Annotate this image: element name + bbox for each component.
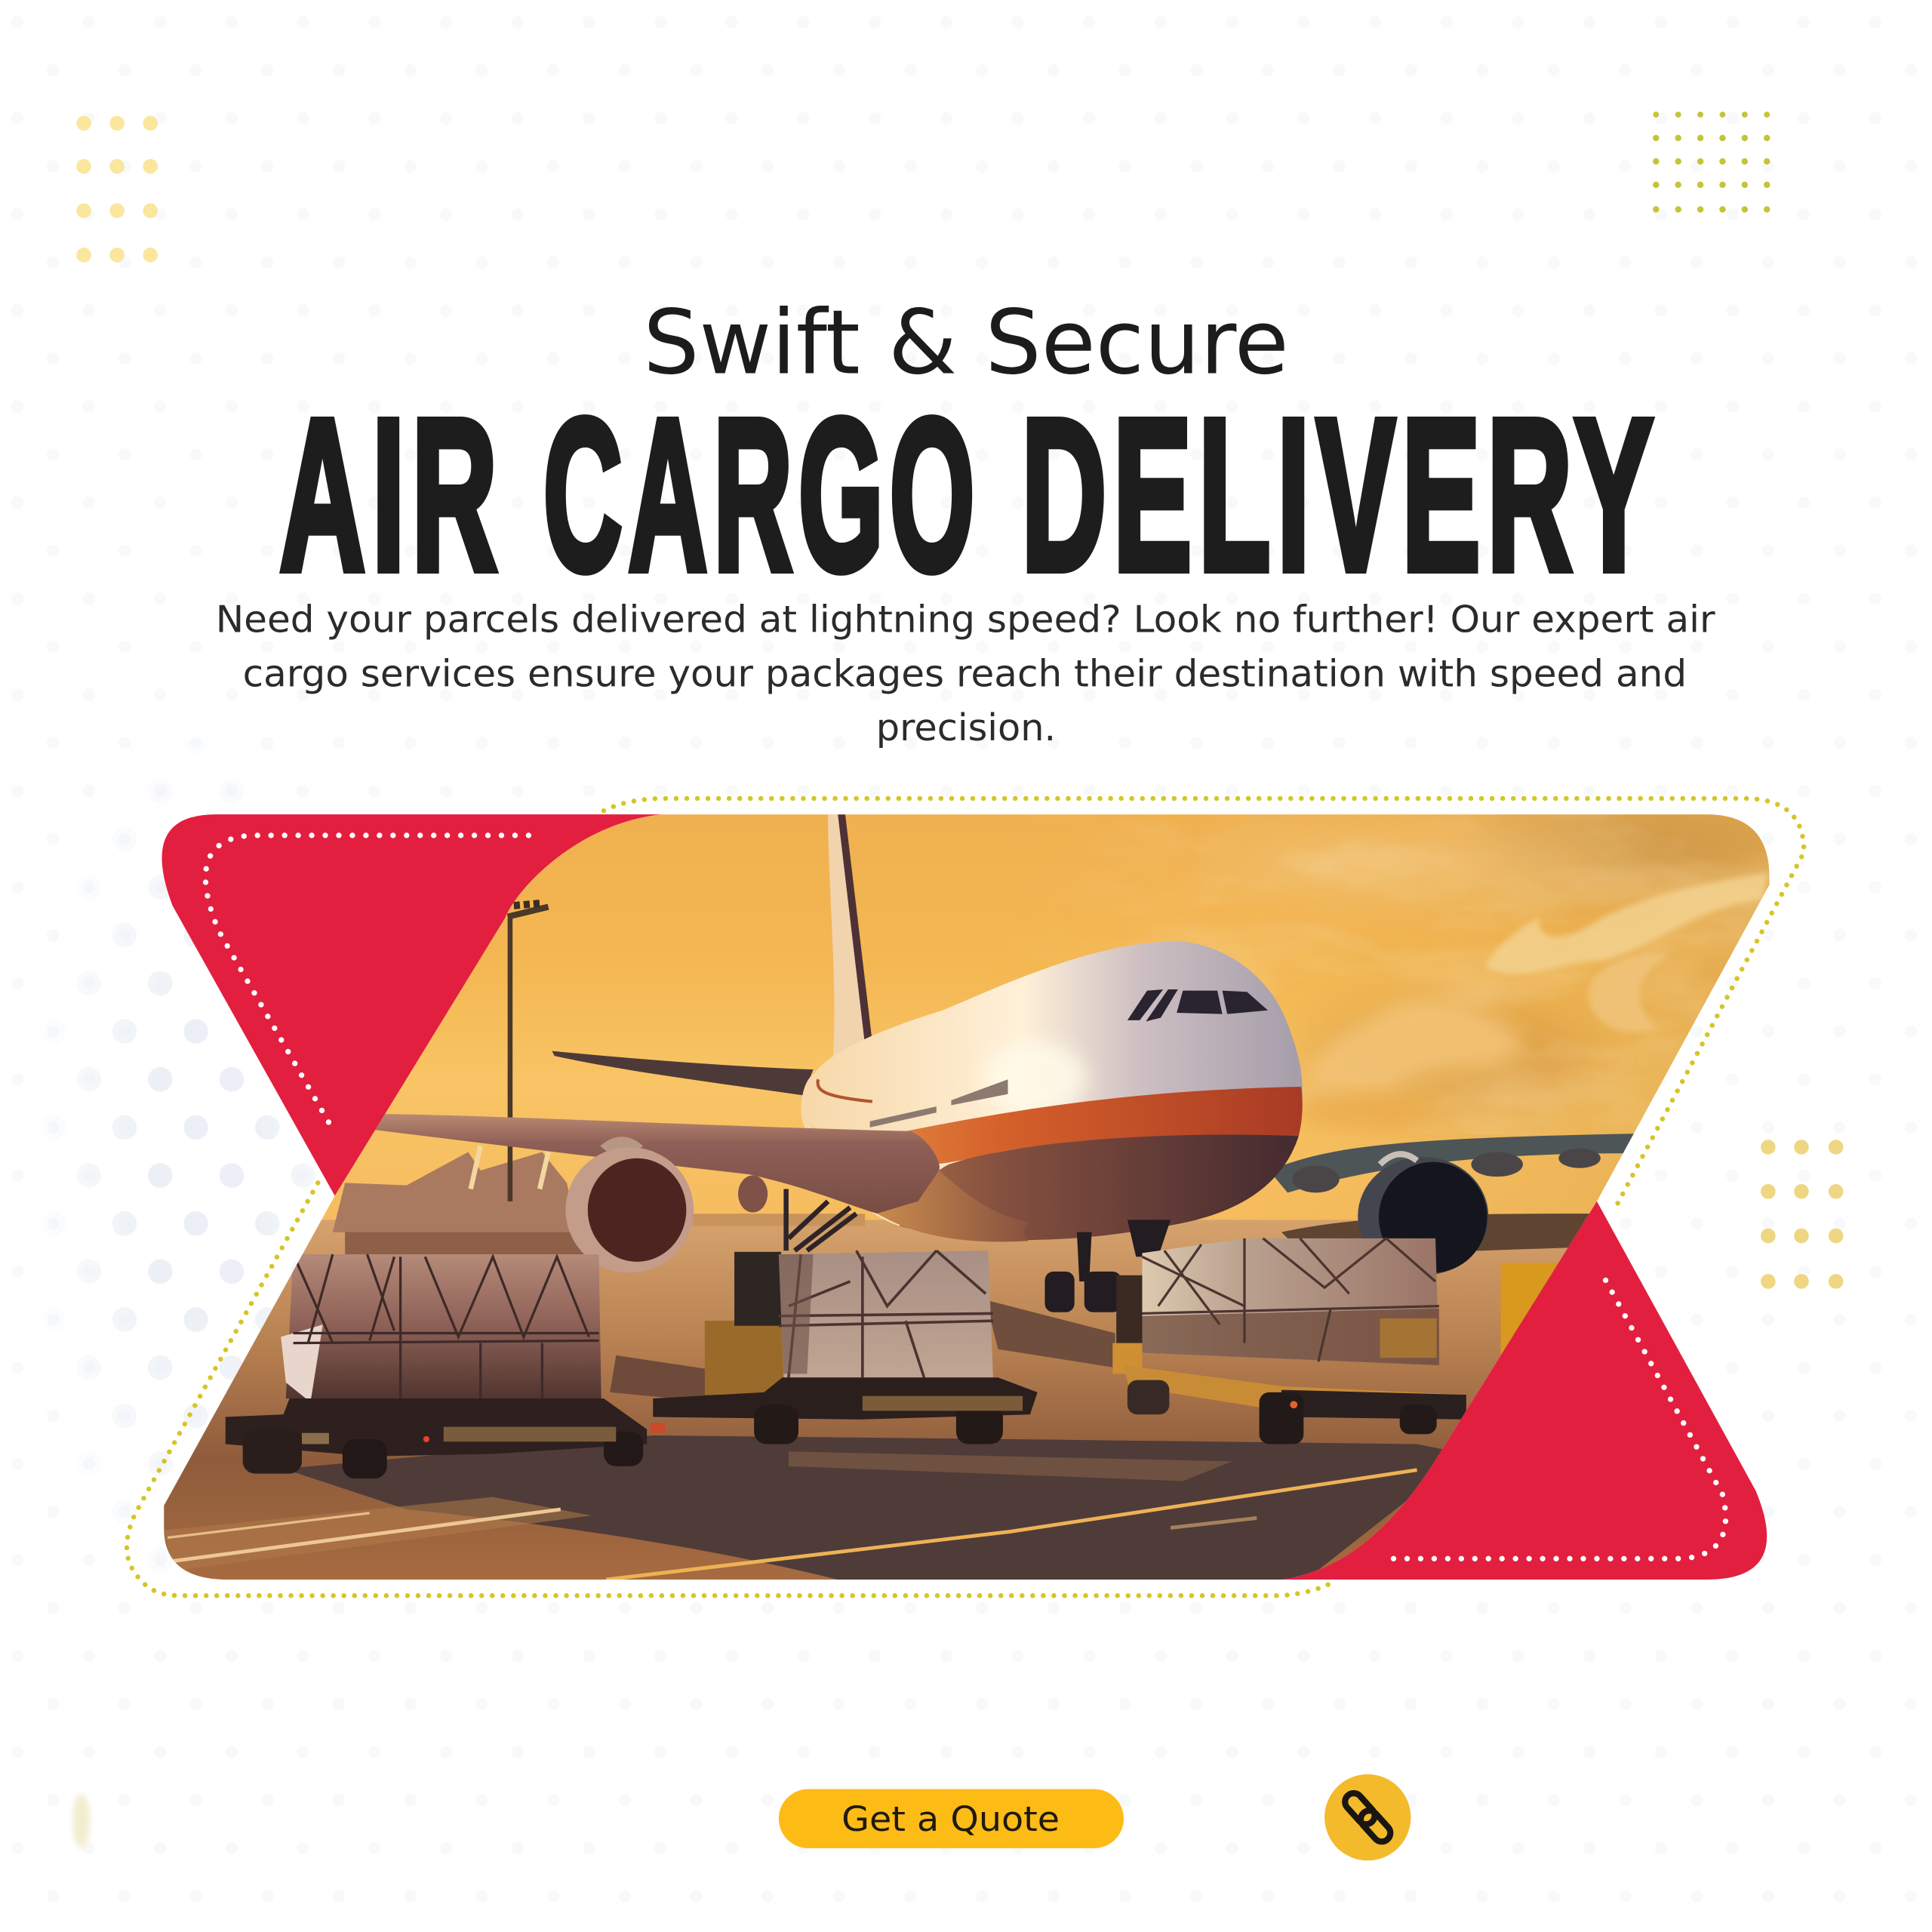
nose and main landing gear	[1044, 1220, 1171, 1312]
left landing gear struts	[786, 1189, 857, 1251]
decorative olive dots top right	[1653, 112, 1770, 213]
description text: cargo services ensure your packages reach their destination with speed and	[243, 652, 1687, 695]
decorative gold dots right	[1761, 1140, 1843, 1289]
middle tractor and box	[705, 1252, 783, 1395]
right dolly	[1112, 1275, 1466, 1444]
button: get a quote: Get a Quote	[841, 1799, 1060, 1839]
clouds	[1094, 814, 1769, 1135]
middle cargo pallet	[779, 1251, 993, 1377]
subtitle: Swift & Secure	[643, 291, 1289, 395]
photo: cargo plane at sunset	[160, 807, 1774, 1589]
cockpit windows	[1128, 989, 1268, 1021]
red shape top left	[162, 814, 662, 1196]
left wing	[374, 1114, 940, 1214]
yellow container	[1501, 1263, 1562, 1374]
main heading: CARGO	[543, 374, 981, 615]
white dotted accent top left	[205, 835, 528, 1125]
decorative gold dots top left	[76, 115, 158, 263]
far right wing	[1269, 1134, 1638, 1192]
page background with faint dot pattern	[47, 740, 315, 1566]
main heading: AIR	[280, 374, 504, 615]
description text: Need your parcels delivered at lightning speed? Look no further! Our expert air	[216, 598, 1716, 641]
icon: link badge	[1324, 1774, 1411, 1860]
under-wing pod	[738, 1176, 768, 1213]
red shape bottom right	[1281, 1201, 1767, 1580]
button: get a quote	[779, 1789, 1124, 1848]
tarmac shadows and lines	[164, 1300, 1466, 1580]
white dotted accent bottom right	[1394, 1278, 1726, 1558]
belly glow behind wing root	[877, 1171, 1029, 1241]
tail fin	[828, 814, 872, 1057]
description text: precision.	[876, 706, 1056, 749]
description text	[216, 598, 1716, 749]
left dolly	[226, 1398, 647, 1478]
right cargo pallet	[1142, 1238, 1439, 1365]
fuselage	[801, 941, 1303, 1240]
small smudge bottom left	[72, 1794, 90, 1848]
yellow dotted outline frame	[127, 798, 1804, 1595]
light pole	[508, 903, 549, 1201]
left cargo pallet	[281, 1254, 601, 1404]
left engine	[565, 1137, 694, 1273]
right engine	[1358, 1154, 1488, 1275]
ground	[164, 1220, 1568, 1580]
horizontal stabilizer	[552, 1051, 814, 1095]
middle dolly	[651, 1377, 1038, 1444]
sky	[305, 814, 1769, 1251]
horizon and distant buildings	[333, 1146, 1589, 1257]
